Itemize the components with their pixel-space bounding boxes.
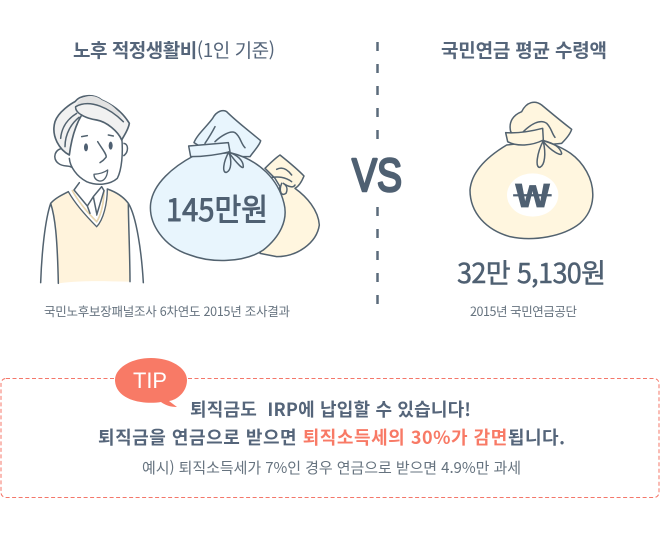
illustration: large blue money bag — [150, 111, 285, 260]
source: right: 2015년 국민연금공단 — [470, 301, 577, 320]
tip line 1: 퇴직금도 IRP에 납입할 수 있습니다! — [190, 396, 471, 422]
tip line 2: 퇴직금을 연금으로 받으면 퇴직소득세의 30%가 감면됩니다. — [98, 424, 565, 450]
panel: tip — [1, 358, 659, 498]
illustration: man in vest — [41, 96, 143, 283]
amount: 145 man won: 145만원 — [166, 185, 268, 230]
source: left: 국민노후보장패널조사 6차연도 2015년 조사결과 — [44, 301, 290, 320]
heading: adequate retirement living cost: 노후 적정생활비(1인 기준) — [73, 36, 275, 63]
icon: TIP speech bubble: TIP — [133, 368, 167, 393]
illustration: cream money bag with won sign — [470, 102, 593, 239]
icon: TIP speech bubble — [115, 358, 187, 407]
VS label: VS — [352, 149, 402, 201]
amount: 325,130 won: 32만 5,130원 — [457, 252, 606, 291]
won symbol: ₩ — [513, 171, 552, 217]
illustration: small back money bag — [260, 155, 319, 257]
tip line 3: 예시) 퇴직소득세가 7%인 경우 연금으로 받으면 4.9%만 과세 — [142, 457, 521, 478]
heading: average national pension: 국민연금 평균 수령액 — [441, 36, 607, 63]
